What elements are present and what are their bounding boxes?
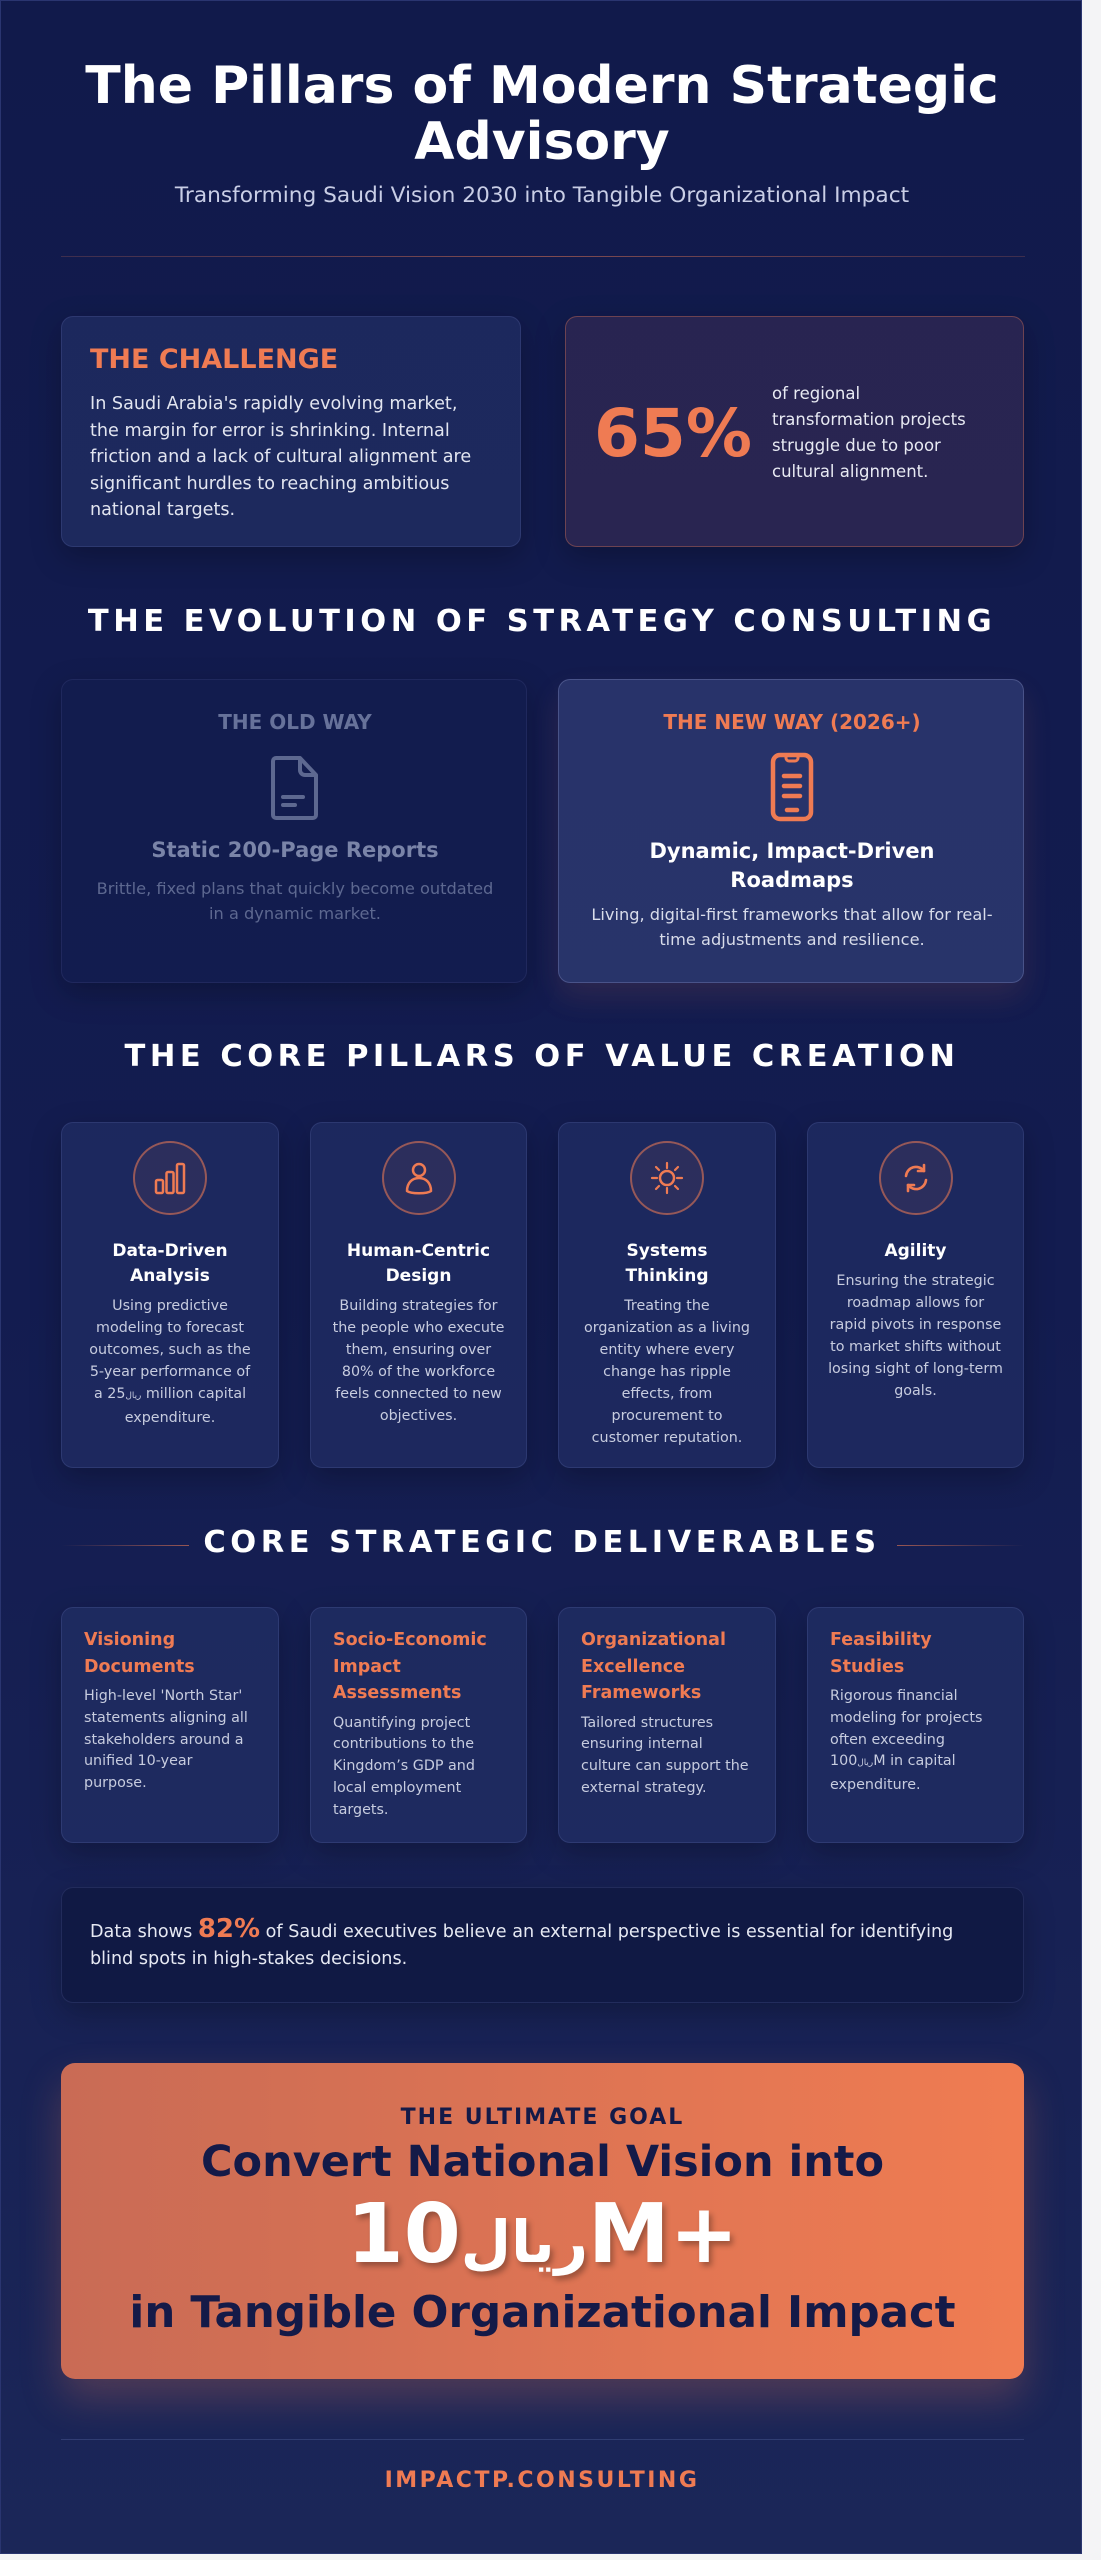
pillar: human-centric: Design [386, 1266, 451, 1286]
deliverable: organizational excellence: Excellence [581, 1656, 685, 1676]
title: The Pillars of Modern Strategic [85, 56, 999, 116]
panel: 65% stat [565, 316, 1024, 547]
challenge text: In Saudi Arabia's rapidly evolving market, the margin for error is shrinking. Internal friction and a lack of cultural alignment are significant hurdles to reaching ambitious national targets. [90, 394, 471, 520]
callout: 82% stat [61, 1887, 1024, 2003]
callout: 82% stat: Data shows 82% of Saudi executives believe an external perspective is essential for identifying blind spots in high-stakes decisions. [90, 1914, 953, 1969]
icon: sun/system [630, 1141, 704, 1215]
deliverable: visioning: High-level 'North Star' statements aligning all stakeholders around a unified 10-year purpose. [84, 1688, 248, 1791]
icon: refresh [878, 1141, 952, 1215]
goal headline: Convert National Vision into [201, 2137, 884, 2187]
pillar: systems thinking [558, 1122, 776, 1468]
deliverable: socio-economic: Quantifying project contributions to the Kingdom’s GDP and local employment targets. [333, 1714, 475, 1818]
deliverable: feasibility: Studies [830, 1656, 904, 1676]
heading: the challenge: THE CHALLENGE [90, 344, 338, 375]
goal figure: 10ريالM+ [347, 2187, 738, 2282]
deliverable: visioning: Visioning [84, 1630, 175, 1650]
pillar: data-driven: Using predictive modeling to forecast outcomes, such as the 5-year performance of a 25ريال million capital expenditure. [89, 1298, 251, 1426]
heading: evolution: THE EVOLUTION OF STRATEGY CONSULTING [88, 604, 996, 639]
icon: person [382, 1141, 456, 1215]
deliverable: organizational excellence: Tailored structures ensuring internal culture can support the external strategy. [581, 1714, 749, 1796]
heading: core pillars: THE CORE PILLARS OF VALUE CREATION [125, 1039, 959, 1074]
pillar: systems thinking: Thinking [625, 1266, 709, 1286]
deliverable: feasibility: Feasibility [830, 1630, 932, 1650]
stat text: of regional transformation projects struggle due to poor cultural alignment. [772, 384, 966, 481]
pillar: agility [807, 1122, 1024, 1468]
new way title: Roadmaps [730, 868, 854, 892]
panel: the challenge [61, 316, 521, 547]
stat number: 65% [594, 395, 752, 472]
new way title [649, 839, 935, 892]
panel: old way [61, 679, 527, 983]
pillar: data-driven: Analysis [130, 1266, 210, 1286]
deliverable: visioning: Documents [84, 1656, 195, 1676]
pillar: data-driven: Data-Driven [112, 1241, 228, 1261]
deliverable: feasibility: Rigorous financial modeling for projects often exceeding 100ريالM in capital expenditure. [830, 1688, 982, 1793]
subtitle: Transforming Saudi Vision 2030 into Tangible Organizational Impact [175, 183, 909, 208]
old way text: Brittle, fixed plans that quickly become outdated in a dynamic market. [97, 879, 493, 923]
goal subline: in Tangible Organizational Impact [129, 2288, 956, 2338]
new way label: THE NEW WAY (2026+) [663, 710, 921, 734]
old way label: THE OLD WAY [218, 710, 372, 734]
deliverable: socio-economic: Socio-Economic [333, 1630, 487, 1650]
deliverable: socio-economic: Assessments [333, 1683, 461, 1703]
icon: document [271, 756, 318, 820]
deliverable: organizational excellence [558, 1607, 776, 1843]
icon: mobile [770, 752, 814, 822]
panel: new way [558, 679, 1024, 983]
pillar: systems thinking: Systems [627, 1241, 707, 1261]
footer: IMPACTP.CONSULTING [385, 2468, 699, 2493]
new way title: Dynamic, Impact-Driven [649, 839, 935, 863]
new way text: Living, digital-first frameworks that allow for real-time adjustments and resilience. [591, 905, 993, 949]
deliverable: feasibility [807, 1607, 1024, 1843]
deliverable: socio-economic: Impact [333, 1656, 401, 1676]
pillar: human-centric [310, 1122, 527, 1468]
pillar: agility: Agility [884, 1241, 946, 1261]
old way title: Static 200-Page Reports [151, 838, 439, 862]
pillar: data-driven [61, 1122, 279, 1468]
deliverable: organizational excellence: Organizational [581, 1630, 726, 1650]
goal label: THE ULTIMATE GOAL [401, 2105, 684, 2130]
title: Advisory [414, 112, 670, 172]
deliverable: visioning [61, 1607, 279, 1843]
pillar: human-centric: Human-Centric [347, 1241, 490, 1261]
pillar: human-centric: Building strategies for the people who execute them, ensuring over 80% of the workforce feels connected to new objectives. [333, 1298, 504, 1424]
deliverable: organizational excellence: Frameworks [581, 1683, 701, 1703]
pillar: systems thinking: Treating the organization as a living entity where every change has ripple effects, from procurement to customer reputation. [584, 1298, 750, 1446]
deliverable: socio-economic [310, 1607, 527, 1843]
heading: deliverables: CORE STRATEGIC DELIVERABLES [203, 1525, 881, 1560]
title [85, 56, 999, 172]
pillar: agility: Ensuring the strategic roadmap allows for rapid pivots in response to market shifts without losing sight of long-term goals. [828, 1273, 1003, 1399]
icon: bar chart [133, 1141, 207, 1215]
panel: ultimate goal [61, 2063, 1024, 2379]
